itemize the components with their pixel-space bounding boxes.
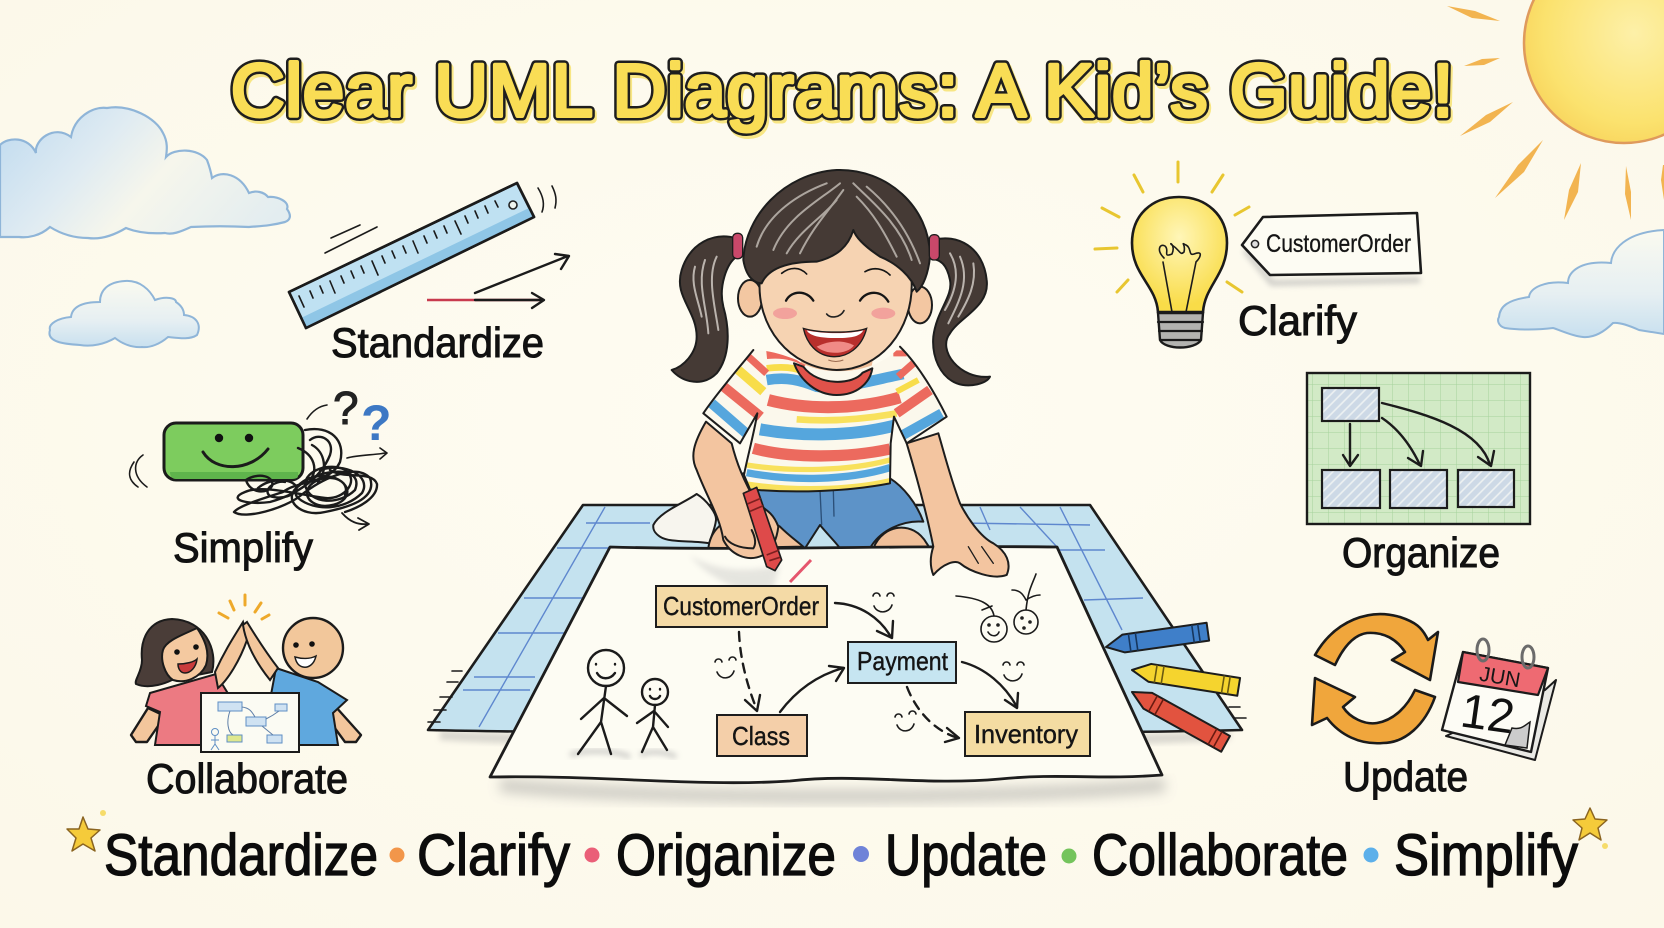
whiteboard bbox=[201, 693, 299, 752]
title: Clear UML Diagrams: A Kid’s Guide! bbox=[231, 49, 1453, 132]
crayon: blue bbox=[1105, 623, 1209, 655]
shorts bbox=[741, 473, 923, 548]
icon: two friends high five with diagram bbox=[131, 595, 361, 752]
girl: legs, sock, shorts and shirt bbox=[653, 170, 990, 548]
label: Simplify: Simplify bbox=[173, 524, 313, 571]
arm and hand: left bbox=[693, 422, 778, 558]
icon: organized diagram on green grid bbox=[1307, 373, 1530, 524]
girl: arms, hands and red crayon bbox=[693, 422, 1009, 577]
eyes and eyebrows bbox=[782, 268, 890, 302]
boy friend bbox=[243, 618, 361, 745]
knees bbox=[708, 513, 803, 548]
cheeks bbox=[773, 308, 797, 319]
bottom summary row: Simplify bbox=[1394, 823, 1578, 888]
ponytails bbox=[672, 236, 737, 382]
sun with rays bbox=[1447, 0, 1664, 220]
face bbox=[760, 226, 912, 370]
neck bbox=[800, 357, 873, 384]
shirt bbox=[703, 347, 947, 491]
girl friend bbox=[131, 619, 247, 745]
label: Collaborate: Collaborate bbox=[146, 755, 348, 802]
class box: Class bbox=[717, 715, 807, 756]
little smile doodles bbox=[715, 593, 1024, 731]
arrows between boxes bbox=[739, 603, 1018, 742]
mouth bbox=[803, 328, 867, 361]
bottom summary row: Update bbox=[885, 823, 1047, 888]
bottom summary row bbox=[67, 808, 1608, 888]
crayon: yellow bbox=[1131, 661, 1240, 696]
hair ties bbox=[733, 233, 743, 259]
stick figures bbox=[570, 650, 676, 757]
red crayon mark bbox=[790, 560, 811, 582]
tag: CustomerOrder: CustomerOrder bbox=[1266, 230, 1411, 258]
icon: smiling eraser with scribble bbox=[129, 382, 392, 530]
arm and hand: right bbox=[907, 433, 1009, 577]
icon: smiling eraser with scribble: ? bbox=[361, 395, 392, 451]
star: left bbox=[67, 817, 100, 851]
class box: Payment bbox=[848, 642, 956, 683]
tag: CustomerOrder bbox=[1242, 213, 1421, 283]
small left cloud bbox=[49, 281, 199, 347]
collar bbox=[794, 363, 872, 395]
crayon: red bbox=[1128, 684, 1230, 752]
UML diagram on the paper bbox=[570, 560, 1090, 757]
icon: light bulb bbox=[1095, 162, 1249, 348]
label: Clarify: Clarify bbox=[1238, 297, 1357, 344]
high five sparks bbox=[219, 595, 269, 619]
icon: calendar June 12: JUN bbox=[1478, 663, 1522, 692]
large left cloud bbox=[0, 107, 290, 238]
central scene: blanket bbox=[428, 505, 1246, 742]
ears bbox=[738, 280, 762, 317]
icon: calendar June 12 bbox=[1442, 639, 1556, 760]
crayon: red in hand bbox=[743, 487, 782, 571]
bottom summary row: Collaborate bbox=[1092, 823, 1348, 888]
doodle heads with hair bbox=[956, 574, 1040, 642]
icon: smiling eraser with scribble: ? bbox=[333, 382, 359, 434]
icon: refresh arrows bbox=[1312, 614, 1438, 743]
nose bbox=[827, 311, 844, 317]
class box: CustomerOrder: CustomerOrder bbox=[663, 591, 819, 621]
hair and bangs bbox=[743, 170, 930, 292]
star: right bbox=[1573, 808, 1607, 840]
label: Update: Update bbox=[1343, 753, 1468, 800]
bottom summary row: Standardize bbox=[104, 823, 378, 888]
sock and foot bbox=[653, 494, 716, 543]
icon: ruler and arrows bbox=[289, 183, 569, 328]
class box: Inventory bbox=[965, 712, 1090, 756]
right cloud bbox=[1498, 230, 1664, 337]
label: Standardize: Standardize bbox=[331, 319, 544, 366]
icon: calendar June 12: 12 bbox=[1458, 685, 1518, 744]
label: Organize: Organize bbox=[1342, 529, 1500, 576]
class box: CustomerOrder bbox=[656, 586, 827, 627]
central scene: paper sheet bbox=[490, 547, 1165, 796]
class box: Inventory: Inventory bbox=[974, 719, 1078, 749]
class box: Class: Class bbox=[732, 721, 790, 751]
title: Clear UML Diagrams: A Kid’s Guide! bbox=[231, 49, 1453, 132]
crayons bbox=[1105, 623, 1240, 752]
fingers over crayon bbox=[725, 530, 755, 548]
bottom summary row: Clarify bbox=[417, 823, 570, 888]
bottom summary row: Origanize bbox=[616, 823, 836, 888]
class box: Payment: Payment bbox=[857, 646, 949, 676]
